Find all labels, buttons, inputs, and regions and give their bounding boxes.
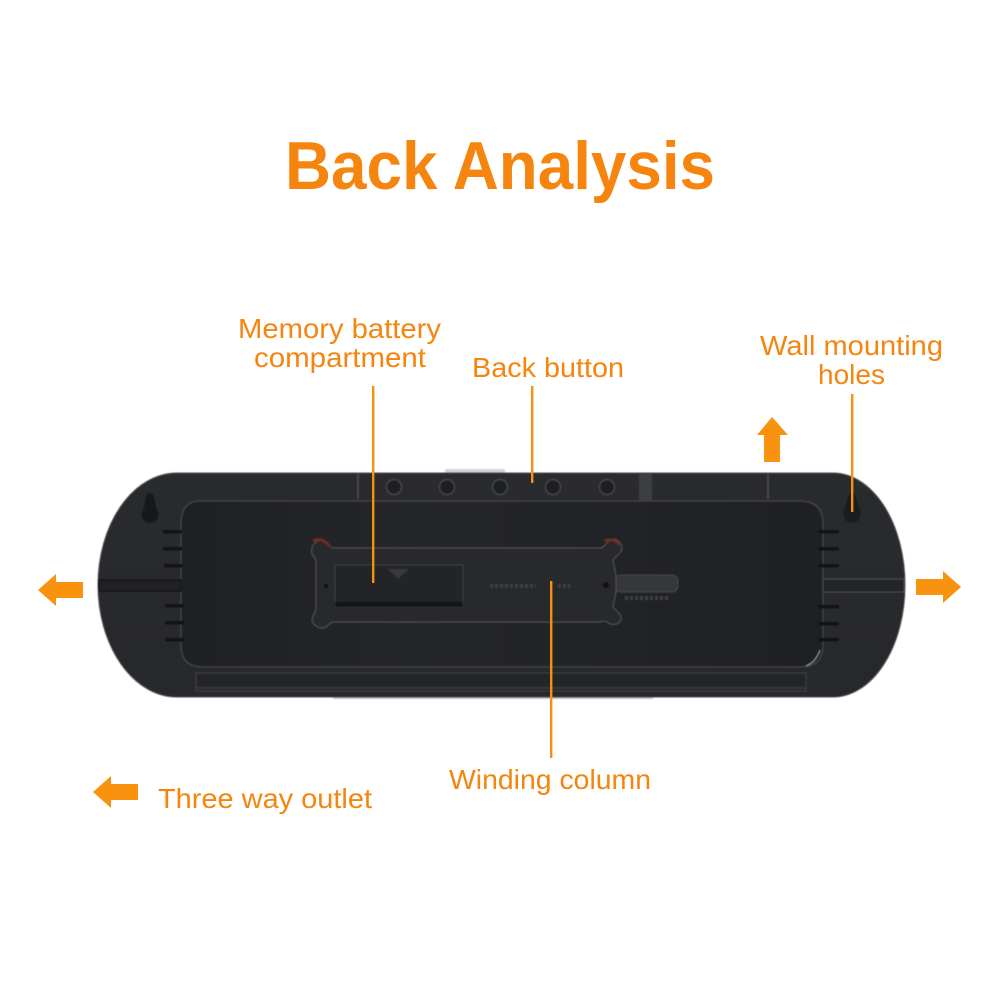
- battery arrow mark: [388, 569, 409, 579]
- callout line: back button: [531, 386, 533, 483]
- top button strip: [358, 473, 768, 499]
- label: wall mounting holes: holes: [818, 359, 885, 390]
- callout line: wall mounting: [851, 394, 853, 512]
- recess: [181, 501, 823, 667]
- left vent slots: [163, 530, 184, 642]
- left keyhole: [142, 493, 158, 523]
- recess corner highlight: [806, 650, 820, 666]
- arrow: up: [757, 417, 788, 462]
- arrow: left: [38, 574, 83, 606]
- bottom strip: [196, 673, 806, 691]
- red accents: [313, 539, 620, 546]
- winding post: [615, 575, 678, 592]
- label: wall mounting holes: Wall mounting: [760, 330, 943, 361]
- label: winding column: Winding column: [449, 764, 651, 795]
- callout line: winding column: [550, 581, 552, 758]
- left seam: [99, 580, 181, 591]
- right keyhole: [844, 493, 860, 523]
- embossed marks: [490, 586, 668, 598]
- label: wall mounting holes: [760, 330, 943, 390]
- arrow: legend left: [93, 776, 138, 808]
- callout line: memory battery: [372, 386, 374, 583]
- label: three way outlet: Three way outlet: [158, 783, 372, 814]
- device: clock back: [98, 469, 905, 699]
- right vent slots: [818, 530, 839, 642]
- center plate: [312, 539, 622, 628]
- back buttons: [386, 480, 614, 494]
- label: memory battery compartment: Memory battery: [238, 313, 441, 344]
- device body: [98, 473, 905, 697]
- right seam: [823, 579, 904, 592]
- arrow: right: [916, 571, 961, 603]
- title: Back Analysis: [285, 128, 715, 204]
- label: back button: Back button: [472, 352, 624, 383]
- label: memory battery compartment: compartment: [254, 342, 426, 373]
- label: memory battery compartment: [238, 313, 441, 373]
- battery door: [335, 565, 463, 607]
- top edge highlight: [445, 469, 505, 474]
- bottom edge highlight: [333, 696, 653, 699]
